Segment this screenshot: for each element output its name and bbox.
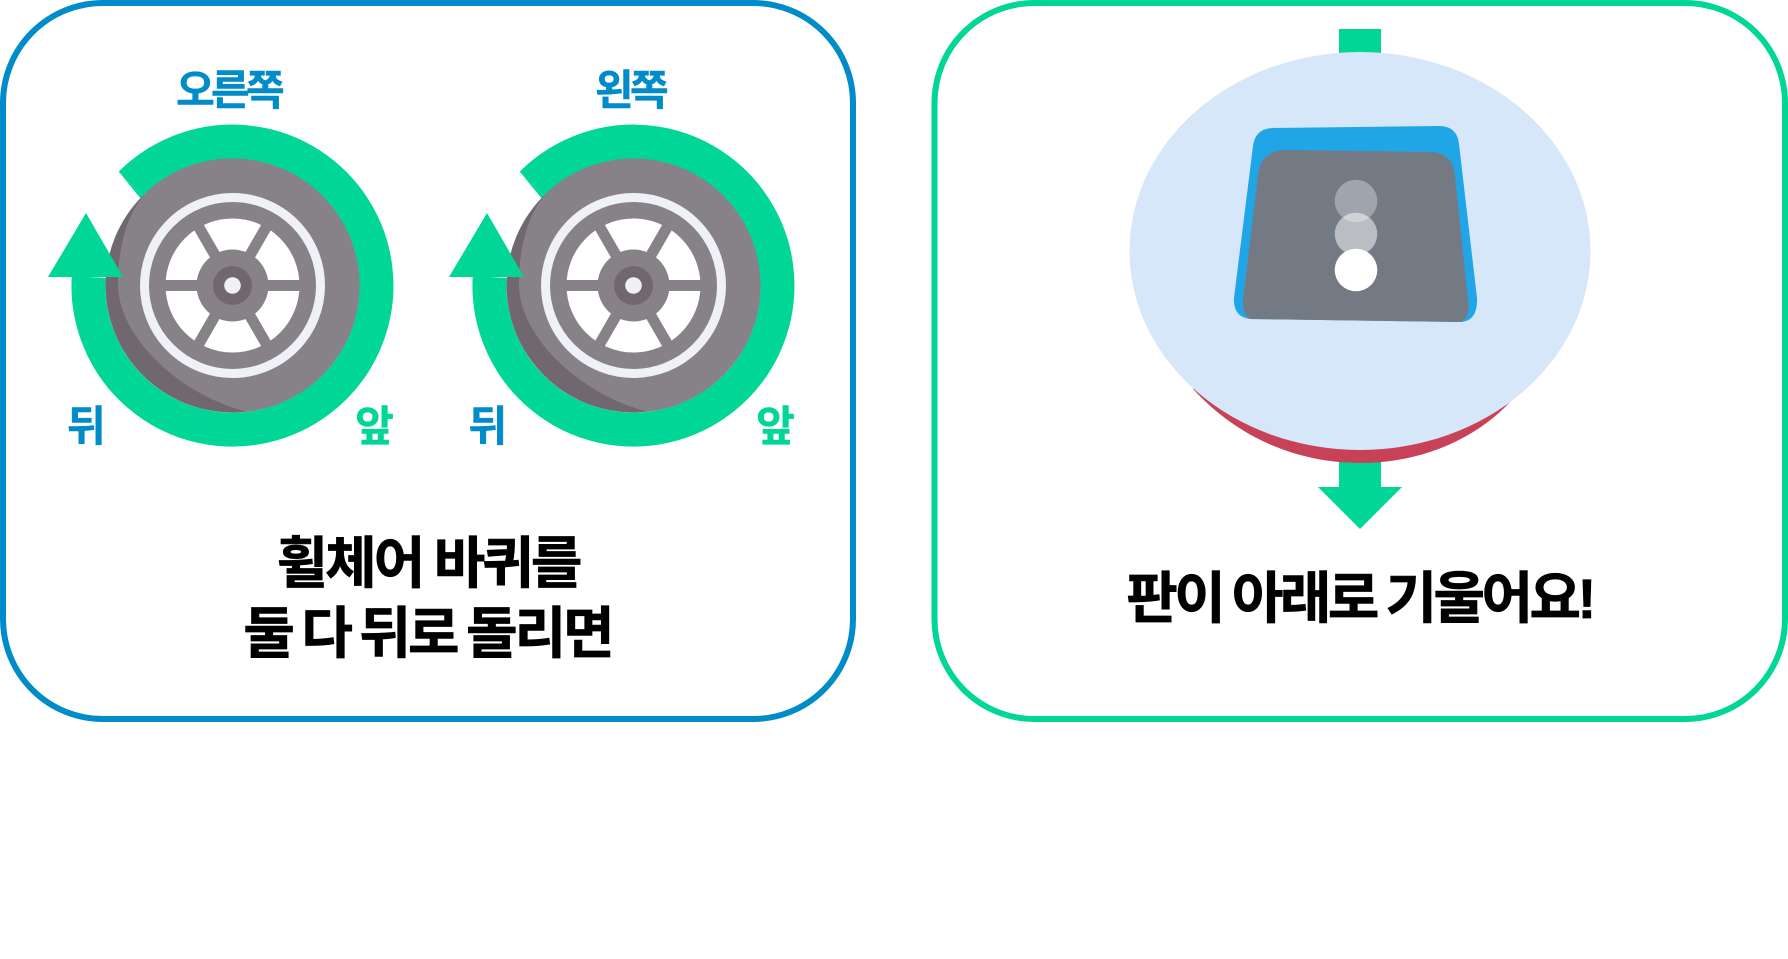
panel: board tilts down	[934, 3, 1785, 719]
heading: wheels backward: 휠체어 바퀴를	[277, 532, 581, 595]
label: back: 뒤	[67, 403, 103, 450]
heading: board tilts down: 판이 아래로 기울어요!	[1126, 567, 1593, 630]
label: front: 앞	[756, 403, 794, 450]
label: front: 앞	[355, 403, 393, 450]
heading: wheels backward	[243, 532, 612, 665]
arrow: downward	[1318, 29, 1402, 529]
icon: right wheel with backward arrow	[48, 100, 400, 430]
label: back: 뒤	[469, 403, 504, 450]
label: right side: 오른쪽	[176, 67, 283, 114]
icon: tilted balance board	[1130, 52, 1590, 463]
heading: wheels backward: 둘 다 뒤로 돌리면	[243, 602, 612, 665]
panel: left wheels backward	[3, 3, 853, 719]
label: left side: 왼쪽	[595, 67, 667, 114]
icon: left wheel with backward arrow	[449, 100, 801, 430]
